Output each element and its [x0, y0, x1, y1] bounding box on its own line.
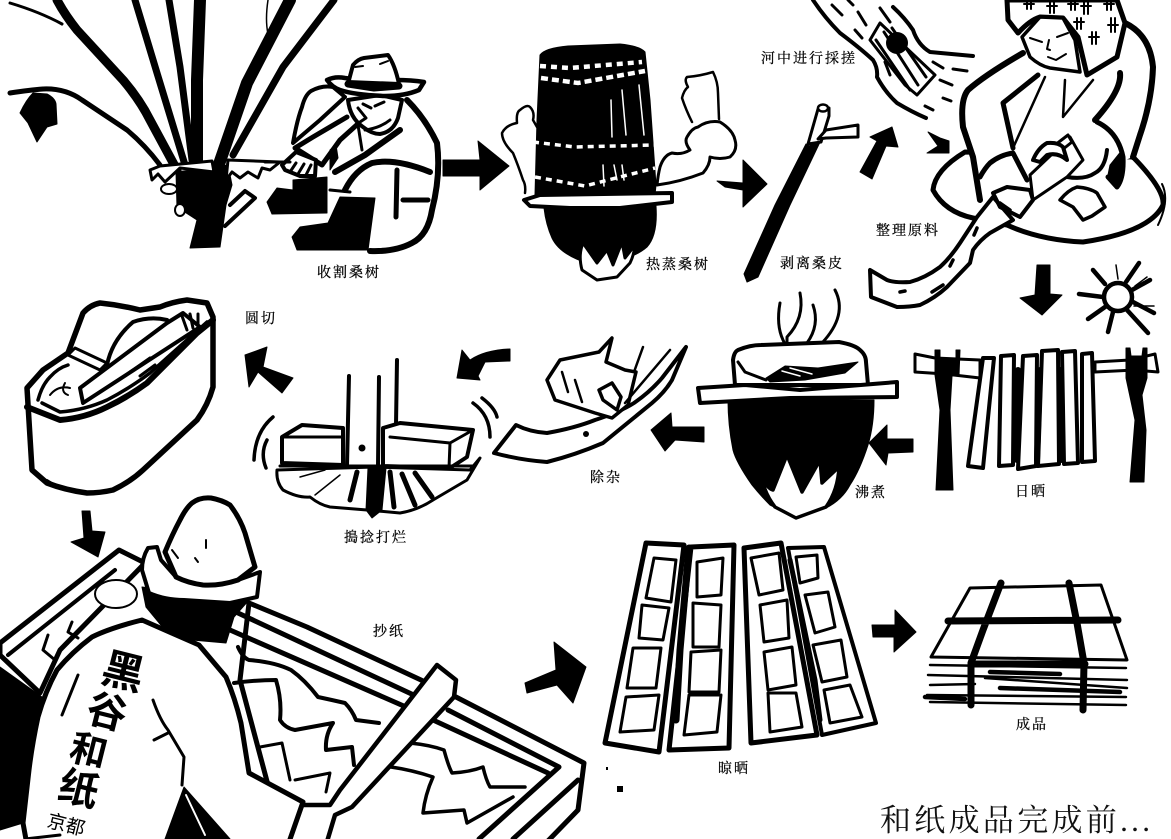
illustration: boiling pot — [698, 290, 897, 518]
arrow: river to workers — [927, 132, 949, 153]
illustration: drying rack with strips — [915, 348, 1158, 490]
caption: sun drying: 日晒 — [1015, 484, 1047, 500]
icon: far frame and water — [230, 603, 584, 839]
icon: drying board two — [669, 545, 734, 750]
illustration: rubbing material in river — [813, 0, 973, 118]
caption: peeling: 剥离桑皮 — [780, 255, 844, 272]
arrow: harvest to steaming — [443, 141, 509, 190]
icon: cloth in water — [870, 23, 935, 95]
icon: hanging strips — [968, 350, 1095, 469]
illustration: finished paper stack — [925, 583, 1127, 710]
illustration: round cutting tub — [27, 300, 213, 493]
text: jacket lettering: 纸 — [54, 764, 103, 816]
icon: drying board one — [605, 543, 684, 752]
caption: papermaking: 抄纸 — [373, 623, 405, 640]
illustration: hand removing impurities — [494, 338, 686, 462]
arrow: pounding to cutting — [245, 347, 293, 393]
caption: harvesting: 收割桑树 — [317, 264, 381, 281]
icon: barrel pot rim — [524, 193, 672, 208]
icon: tub rim and block — [27, 313, 213, 488]
specks — [606, 767, 623, 792]
icon: paper band — [494, 347, 686, 462]
text: jacket lettering — [45, 644, 149, 839]
illustration: steaming mulberry barrel — [502, 44, 736, 280]
text: jacket lettering: 黑 — [97, 644, 149, 700]
caption: boiling: 沸煮 — [855, 484, 887, 501]
arrow: arranging to sun drying — [1020, 265, 1062, 315]
illustration: harvesting mulberry tree — [10, 0, 438, 252]
icon: motion arcs — [254, 398, 497, 468]
illustration: pounding mallet — [254, 360, 497, 518]
icon: binding straps — [948, 583, 1118, 710]
icon: right steam cloud — [657, 72, 736, 185]
text: jacket lettering: 和 — [66, 727, 111, 776]
illustration: peeling mulberry bark — [744, 104, 858, 282]
illustration: woman arranging material — [870, 0, 1165, 307]
arrow: drying to boiling — [869, 425, 913, 465]
caption: air drying: 晾晒 — [718, 761, 750, 777]
arrow: boiling to removing impurities — [651, 413, 704, 451]
title: 和纸成品完成前... — [880, 803, 1153, 838]
icon: worker in hat with saw — [265, 55, 438, 252]
icon: frame stick — [286, 665, 456, 839]
icon: black barrel with ropes — [533, 44, 656, 195]
icon: roll and hands — [1030, 135, 1105, 220]
icon: sun — [1079, 263, 1154, 333]
arrow: curved toward pounding — [457, 349, 510, 380]
caption: round cutting: 圆切 — [245, 311, 277, 327]
icon: worker back — [23, 620, 303, 839]
icon: drying board four — [788, 547, 876, 735]
icon: pulp — [277, 458, 480, 518]
icon: paper strip — [870, 187, 1033, 307]
icon: stack top — [931, 585, 1127, 660]
icon: left frame and dark area — [0, 550, 145, 830]
icon: hand — [547, 338, 670, 437]
icon: tub body — [27, 300, 213, 493]
icon: black stick — [744, 142, 820, 282]
icon: headscarf with patterned hood — [1007, 0, 1125, 75]
illustration: papermaking worker and frame — [0, 498, 584, 839]
icon: seated lap — [933, 152, 1163, 242]
text: jacket lettering: 谷 — [82, 687, 132, 739]
caption: pounding: 搗捻打烂 — [344, 529, 408, 546]
icon: river banks and ripples — [813, 0, 973, 118]
icon: black pot with flame — [728, 400, 874, 518]
arrow: cutting to papermaking — [71, 511, 105, 557]
icon: pot upper bowl and contents — [733, 342, 868, 385]
icon: stack sides — [925, 665, 1127, 705]
icon: pot rim band — [698, 382, 897, 403]
icon: robed torso — [962, 23, 1165, 225]
arrow: papermaking to air drying — [525, 642, 586, 703]
icon: drying board three — [744, 543, 817, 743]
caption: removing impurities: 除杂 — [590, 469, 622, 486]
icon: pounding blocks — [280, 423, 475, 468]
arrow: drying to finished stack — [872, 610, 916, 652]
icon: mulberry plant stems and trunk — [10, 0, 334, 248]
arrow: peeling up to river — [860, 127, 898, 179]
icon: steam lines — [779, 290, 839, 365]
icon: rack posts and pole — [915, 348, 1158, 490]
icon: wooden posts — [347, 360, 397, 467]
caption: steaming: 热蒸桑树 — [646, 256, 710, 273]
caption: arranging material: 整理原料 — [876, 222, 940, 239]
illustration: drying boards — [605, 543, 876, 752]
icon: peeled stick top and bark strip — [808, 104, 858, 144]
caption: rubbing in river: 河中进行採搓 — [761, 50, 857, 67]
icon: pot and flame — [544, 206, 656, 280]
icon: worker hat and neck — [142, 498, 260, 643]
caption: finished product: 成品 — [1016, 716, 1048, 733]
icon: left steam cloud — [502, 106, 537, 193]
arrow: steaming to peeling — [717, 160, 767, 207]
